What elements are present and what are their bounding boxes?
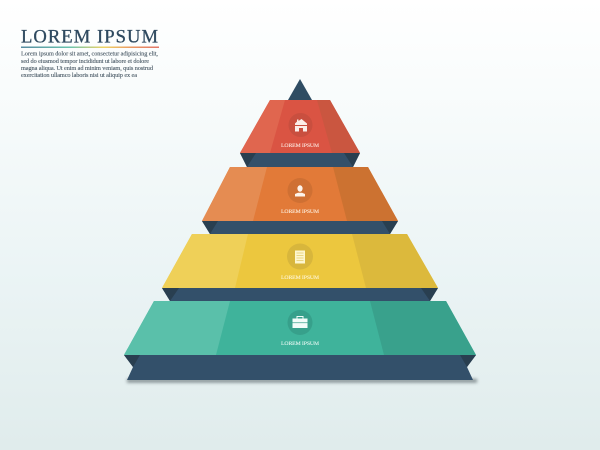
trapezoid centre [240,100,360,153]
trapezoid centre [124,301,476,355]
drop shadow [127,379,477,383]
right facet [370,301,476,355]
trapezoid centre [202,167,398,221]
pyramid apex [288,79,312,100]
left facet [162,234,248,288]
right fold [421,288,438,301]
tier 2: orange [202,167,398,234]
description text [21,50,158,79]
left facet [124,301,230,355]
right facet [317,100,360,153]
icon circle [287,244,313,270]
left fold [240,153,256,167]
icon circle [288,178,312,203]
description text: magna aliqua. Ut enim ad minim veniam, quis nostrud [21,65,154,72]
tier 3: yellow [162,234,438,301]
left fold [124,355,140,367]
left facet [240,100,285,153]
dark base [240,153,360,167]
icon: briefcase [292,316,308,328]
left facet [202,167,267,221]
icon circle [288,113,312,137]
right facet [333,167,398,221]
left fold [202,221,218,234]
right fold [344,153,360,167]
icon: document [295,250,305,264]
label: LOREM IPSUM [281,275,319,281]
description text: sed do eiusmod tempor incididunt ut labore et dolore [21,58,149,65]
label: LOREM IPSUM [281,209,319,215]
right fold [382,221,398,234]
description text: exercitation ullamco laboris nisi ut aliquip ex ea [21,72,137,79]
right fold [460,355,476,367]
tier 1: red [240,100,360,167]
dark base [202,221,398,234]
title rule [21,47,159,48]
right facet [352,234,438,288]
icon: person [295,185,305,196]
title: LOREM IPSUM [21,26,158,47]
dark base [124,355,476,380]
description text: Lorem ipsum dolor sit amet, consectetur adipisicing elit, [21,50,158,58]
icon circle [288,310,312,335]
header [21,26,159,79]
label: LOREM IPSUM [281,143,319,149]
label: LOREM IPSUM [281,341,319,347]
tier 4: teal [124,301,477,383]
icon: house [295,119,307,132]
trapezoid centre [162,234,438,288]
dark base [162,288,438,301]
left fold [162,288,179,301]
